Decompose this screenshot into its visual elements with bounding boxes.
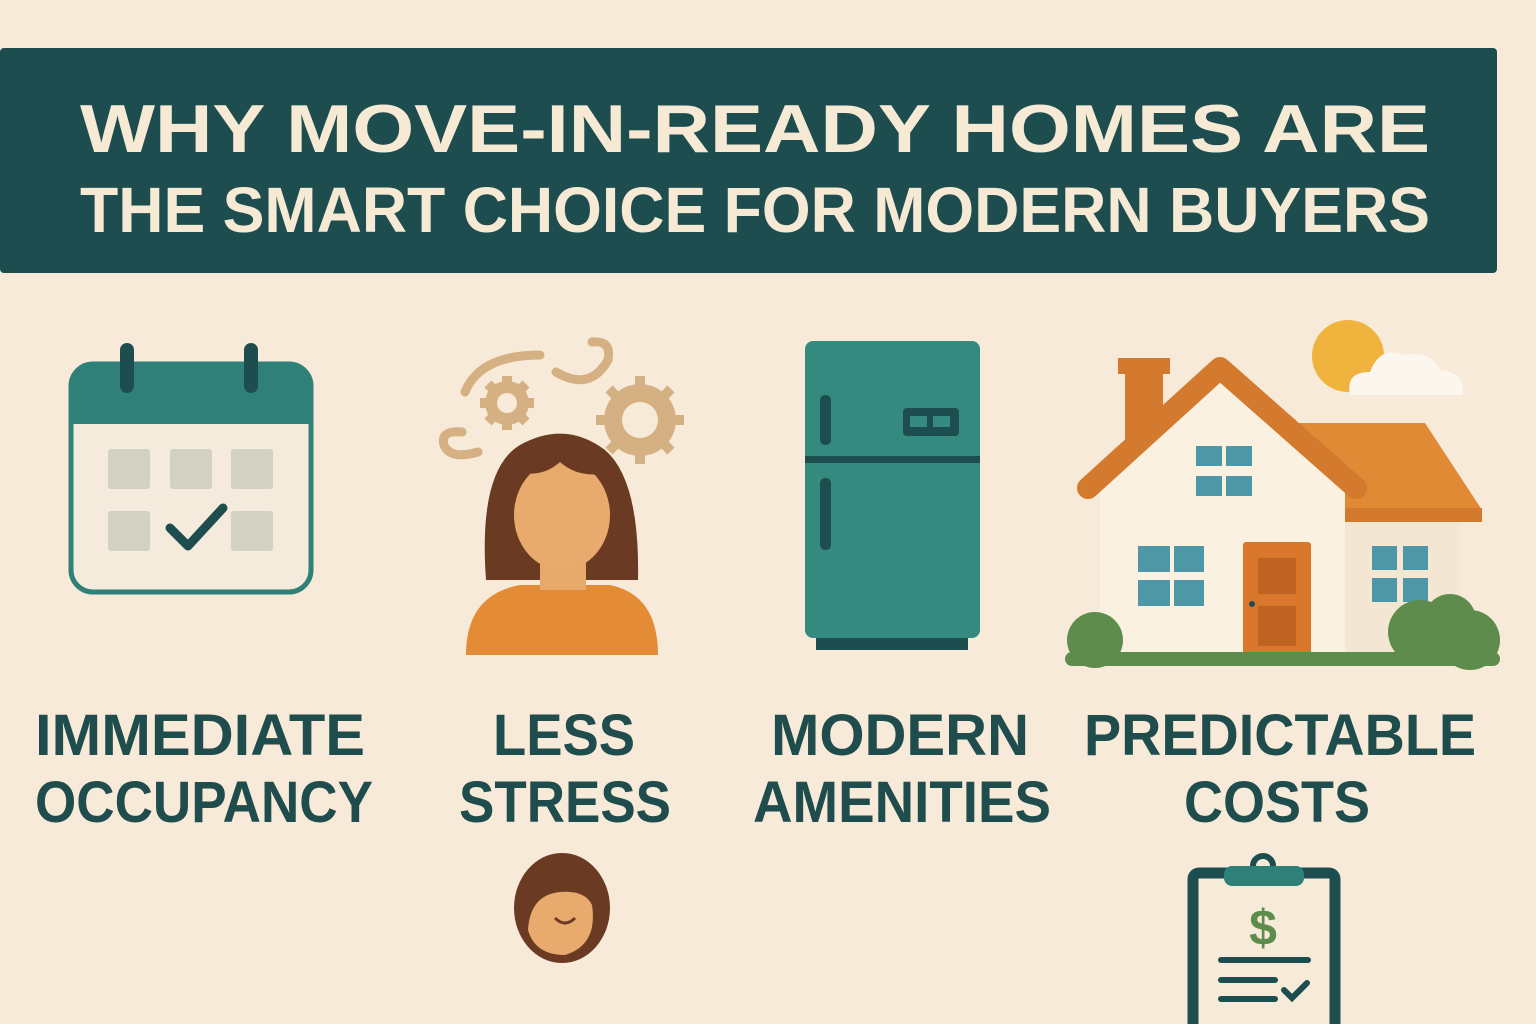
label: modern amenities (753, 703, 1051, 835)
icon: calendar (71, 343, 311, 592)
icon: house with sun (1065, 320, 1500, 670)
label: immediate occupancy: IMMEDIATE (35, 703, 365, 768)
icon: stressed woman with gears (443, 342, 684, 655)
icon: clipboard: $ (1249, 900, 1277, 956)
label: predictable costs: COSTS (1184, 770, 1370, 835)
label: modern amenities: MODERN (771, 703, 1029, 768)
label: less stress: STRESS (459, 770, 671, 835)
icon: clipboard (1193, 856, 1335, 1024)
title banner: WHY MOVE-IN-READY HOMES ARE (80, 91, 1430, 167)
label: immediate occupancy: OCCUPANCY (35, 770, 373, 835)
title banner: THE SMART CHOICE FOR MODERN BUYERS (80, 174, 1430, 246)
label: modern amenities: AMENITIES (753, 770, 1051, 835)
title banner (0, 48, 1497, 273)
label: less stress: LESS (493, 703, 635, 768)
label: immediate occupancy (35, 703, 373, 835)
icon: refrigerator (805, 341, 980, 650)
icon: calm face (514, 853, 610, 963)
label: less stress (459, 703, 671, 835)
label: predictable costs (1084, 703, 1476, 835)
label: predictable costs: PREDICTABLE (1084, 703, 1476, 768)
